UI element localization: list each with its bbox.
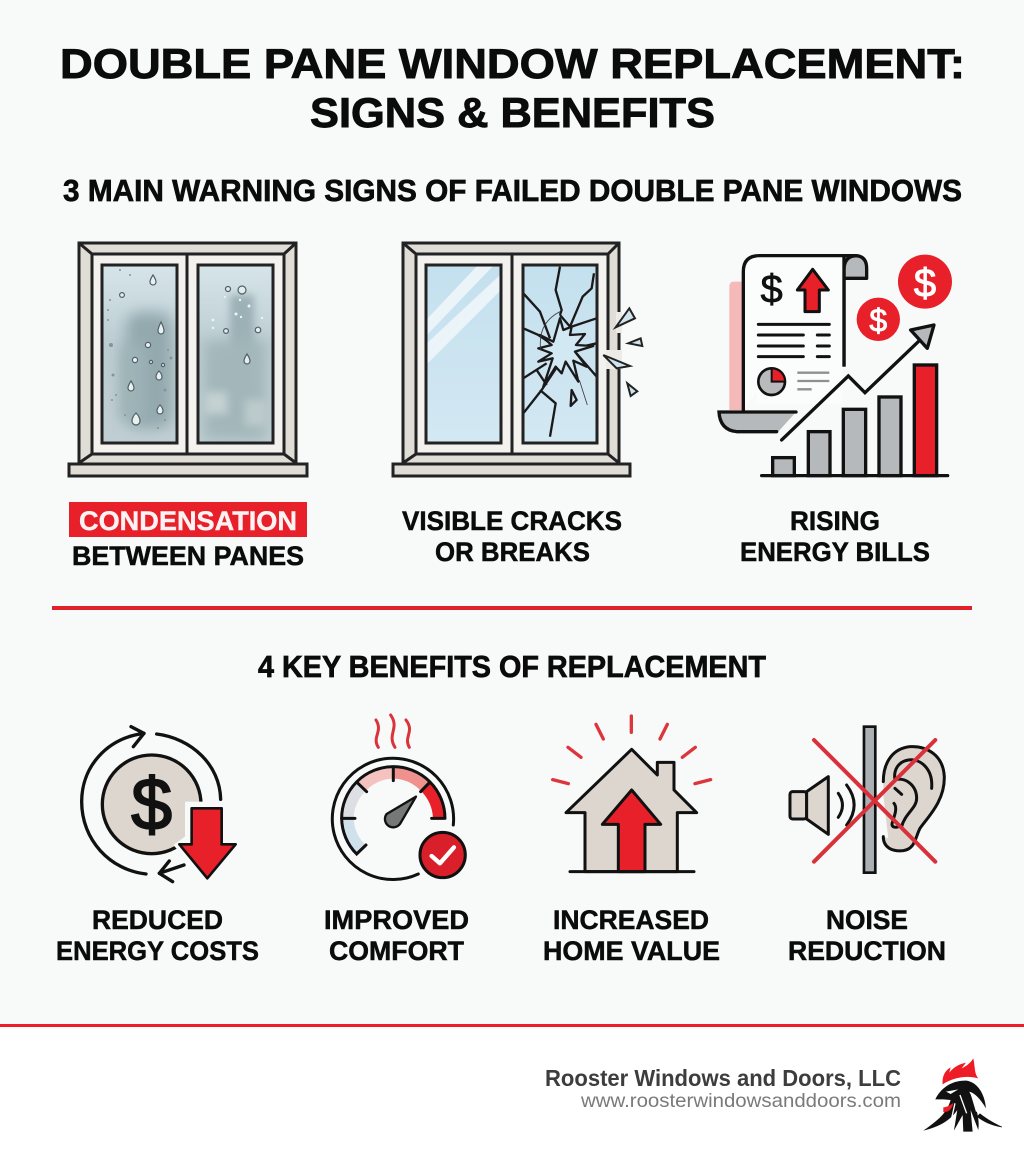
dial ring (332, 758, 454, 880)
heading: warning signs: 3 MAIN WARNING SIGNS OF FAILED DOUBLE PANE WINDOWS (63, 173, 962, 208)
needle (385, 797, 416, 827)
title: SIGNS & BENEFITS (310, 89, 715, 136)
gaps in frame at the break (606, 312, 622, 369)
icon: increased home value (553, 716, 711, 872)
footer (0, 1024, 1024, 1154)
right fogged pane (198, 265, 273, 443)
glass shards (603, 308, 642, 396)
label: condensation: CONDENSATION (79, 506, 297, 536)
heat waves (376, 715, 410, 747)
up arrow (602, 790, 661, 872)
bill shadow (729, 282, 745, 410)
label: rising energy bills (740, 506, 930, 567)
cycle arrows (82, 727, 221, 882)
icon: reduced energy costs (82, 727, 236, 883)
title: DOUBLE PANE WINDOW REPLACEMENT: (60, 40, 965, 87)
panel: condensation window (69, 243, 307, 476)
speaker (790, 777, 828, 834)
pane outlines (426, 265, 597, 443)
bill paper (743, 256, 857, 411)
trend arrow (782, 341, 919, 440)
wall (864, 727, 875, 873)
tray (719, 412, 796, 432)
title (60, 40, 965, 136)
label: noise reduction: REDUCTION (788, 936, 946, 966)
check badge (420, 832, 465, 878)
label: increased home value: HOME VALUE (543, 936, 720, 966)
label: improved comfort: COMFORT (329, 936, 464, 966)
rays (553, 716, 711, 784)
label: noise reduction: NOISE (826, 905, 908, 935)
coin (102, 755, 201, 854)
dollar sign: $ (761, 267, 783, 311)
icon: rising energy bill and bar chart: $ (914, 262, 936, 306)
label: reduced energy costs (56, 905, 259, 966)
cracked pane (523, 265, 597, 443)
sound waves (838, 785, 854, 825)
icon: improved comfort gauge (332, 715, 465, 880)
label: visible cracks: VISIBLE CRACKS (402, 506, 622, 536)
label: visible cracks: OR BREAKS (435, 537, 590, 567)
label: reduced energy costs: ENERGY COSTS (56, 936, 259, 966)
left fogged pane (102, 265, 177, 443)
pane outlines (102, 265, 273, 443)
icon: rising energy bill and bar chart: $ (869, 302, 887, 338)
icon: noise reduction (790, 727, 944, 873)
label: condensation: BETWEEN PANES (72, 541, 304, 571)
logo: rooster (923, 1058, 1002, 1132)
heading: benefits: 4 KEY BENEFITS OF REPLACEMENT (258, 649, 766, 684)
bars (773, 365, 937, 476)
intact pane (426, 265, 501, 443)
window frame (393, 243, 630, 476)
label: increased home value (543, 905, 720, 966)
label: visible cracks (402, 506, 622, 567)
text lines (758, 324, 829, 357)
panel: cracked window (393, 243, 642, 476)
icon: rising energy bill and bar chart (719, 255, 952, 476)
label: noise reduction (788, 905, 946, 966)
label: rising energy bills: ENERGY BILLS (740, 537, 930, 567)
divider (52, 606, 972, 610)
label: reduced energy costs: REDUCED (92, 905, 223, 935)
label: condensation (69, 502, 307, 571)
website: www.roosterwindowsanddoors.com (580, 1090, 901, 1112)
ear (883, 747, 944, 851)
down arrow (173, 802, 236, 883)
cross-out (814, 740, 935, 862)
label: improved comfort: IMPROVED (324, 905, 469, 935)
house (566, 749, 697, 872)
icon: reduced energy costs: $ (131, 763, 172, 845)
ground (570, 867, 694, 876)
label: improved comfort (324, 905, 469, 966)
pie chart (758, 368, 785, 395)
company name: Rooster Windows and Doors, LLC (545, 1065, 901, 1091)
window frame (69, 243, 307, 476)
dial segments (347, 772, 439, 850)
label: increased home value: INCREASED (553, 905, 709, 935)
label: rising energy bills: RISING (790, 506, 880, 536)
up arrow (797, 269, 828, 312)
coins (857, 298, 900, 341)
